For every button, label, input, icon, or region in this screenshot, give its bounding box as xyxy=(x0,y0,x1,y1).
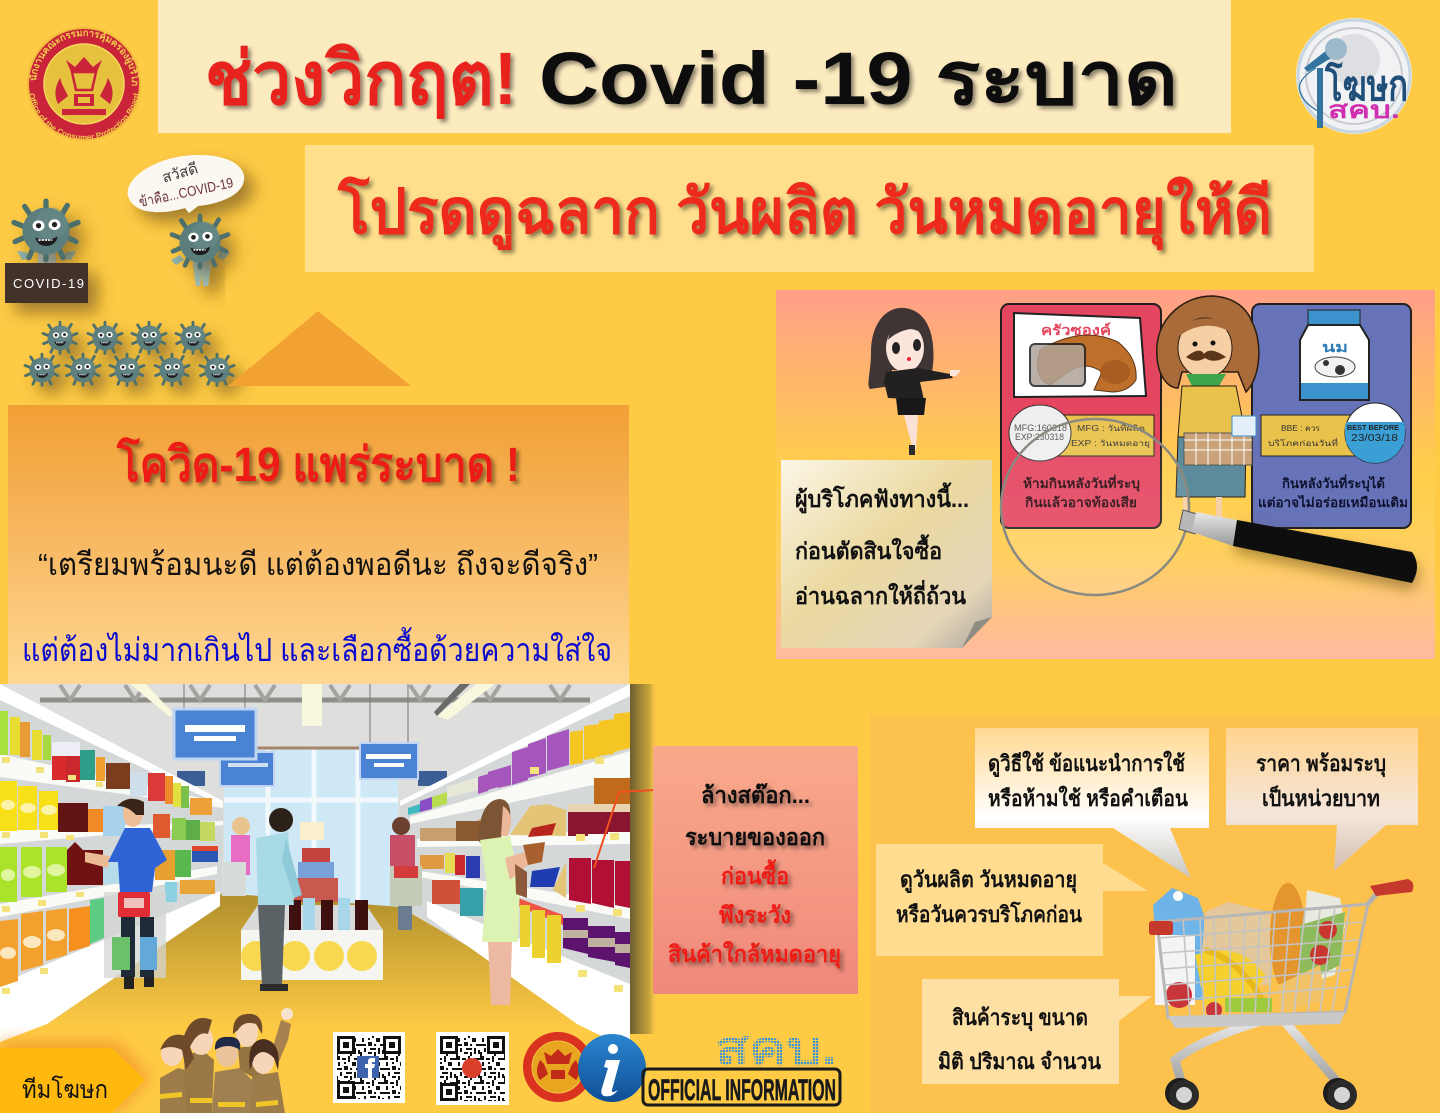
sign: covid-19: COVID-19 xyxy=(13,276,84,291)
callout: greeting speech bubble: สวัสดี xyxy=(160,160,200,187)
shopper: small woman right xyxy=(390,817,422,930)
left products xyxy=(0,711,218,987)
text: warning lines: ระบายของออก xyxy=(685,824,825,850)
text: warning lines: พึงระวัง xyxy=(719,902,791,928)
right products xyxy=(408,712,630,968)
card: use-by red: กินแล้วอาจท้องเสีย xyxy=(1025,495,1137,510)
text: do not eat: ห้ามกินหลังวันที่ระบุ xyxy=(1023,474,1140,492)
subtitle: โปรดดูฉลาก วันผลิต วันหมดอายุให้ดี xyxy=(337,175,1272,250)
panel: label checklist xyxy=(870,715,1440,1113)
right shelves xyxy=(400,684,630,1040)
icon: consumer protection board seal left xyxy=(27,27,141,141)
belts xyxy=(160,1092,278,1107)
text: note lines xyxy=(795,482,969,609)
panel: clear stock warning xyxy=(653,746,858,994)
illustration: officer team xyxy=(160,1008,293,1113)
raised arm xyxy=(272,1020,291,1064)
milk carton: นม xyxy=(1322,339,1348,355)
icon: standing virus xyxy=(171,216,230,286)
panel: title banner xyxy=(158,0,1231,133)
icon: crowd of viruses xyxy=(25,322,234,385)
panel: consumer label guide xyxy=(776,290,1435,659)
officer bodies xyxy=(160,1068,192,1113)
panel: subtitle banner xyxy=(305,145,1314,272)
icon: seal QR code xyxy=(436,1032,509,1105)
card: best before blue xyxy=(1252,304,1411,528)
text: warning lines: สินค้าใกล้หมดอายุ xyxy=(668,940,841,969)
croissant packet xyxy=(1014,313,1146,397)
text: warning lines: ล้างสต๊อก... xyxy=(701,782,810,808)
arrow: team tag xyxy=(0,1040,152,1113)
pointer line to shelf xyxy=(594,790,654,868)
callout: size: สินค้าระบุ ขนาด xyxy=(952,1005,1088,1032)
callout: greeting speech bubble xyxy=(128,155,244,213)
icon: information xyxy=(578,1034,646,1102)
signs xyxy=(184,684,408,745)
icon: consumer protection board seal left: Office of the Consumer Protection Board xyxy=(30,93,139,140)
frame xyxy=(1175,1022,1340,1088)
illustration: shopper woman xyxy=(1157,296,1259,527)
milk carton xyxy=(1300,310,1369,400)
heading: outbreak: โควิด-19 แพร่ระบาด ! xyxy=(116,436,520,492)
groceries xyxy=(1153,888,1204,1000)
callout: listen here note xyxy=(781,460,992,648)
text: official information badge xyxy=(643,1022,840,1107)
text: quote: “เตรียมพร้อมนะดี แต่ต้องพอดีนะ ถึงจะดีจริง” xyxy=(38,547,598,582)
floor xyxy=(0,893,630,1113)
shopper: woman in green xyxy=(478,799,545,1005)
icon: spokesperson logo right: โฆษก xyxy=(1324,61,1408,109)
croissant packet: ครัวซองค์ xyxy=(1041,322,1111,338)
icon: magnifying glass xyxy=(1001,419,1418,595)
label: mfg exp: EXP : วันหมดอายุ xyxy=(1071,439,1150,448)
callout: size: มิติ ปริมาณ จำนวน xyxy=(938,1049,1101,1074)
label: mfg exp xyxy=(1009,405,1154,461)
label: best before: BBE : ควร xyxy=(1281,424,1321,433)
icon: virus holding covid sign xyxy=(5,201,88,303)
window xyxy=(224,748,398,908)
callout: instructions xyxy=(975,728,1209,878)
card: best before blue: แต่อาจไม่อร่อยเหมือนเดิม xyxy=(1258,494,1408,510)
faces xyxy=(161,1040,183,1066)
callout: size xyxy=(922,979,1152,1084)
text: advice: แต่ต้องไม่มากเกินไป และเลือกซื้อด้วยความใส่ใจ xyxy=(22,627,612,668)
callout: price: เป็นหน่วยบาท xyxy=(1262,784,1380,811)
illustration: presenter girl xyxy=(868,308,961,455)
label: best before: 23/03/18 xyxy=(1351,433,1399,444)
callout: dates: หรือวันควรบริโภคก่อน xyxy=(896,901,1082,927)
handle xyxy=(1368,885,1412,904)
callout: dates xyxy=(876,844,1148,956)
wheels xyxy=(1165,1078,1195,1108)
icon: microphone xyxy=(1299,38,1347,128)
text: warning lines: ก่อนซื้อ xyxy=(721,859,789,889)
label: mfg exp: EXP:230318 xyxy=(1015,432,1064,442)
title: main heading: Covid -19 ระบาด xyxy=(539,37,1178,120)
shopper: man in blue xyxy=(85,799,167,989)
display table xyxy=(241,930,383,980)
text: official information badge: OFFICIAL INFORMATION xyxy=(648,1074,836,1107)
callout: instructions: หรือห้ามใช้ หรือคำเตือน xyxy=(988,785,1188,811)
text: OCPB pixel word: สคบ. xyxy=(715,1022,837,1074)
shopper: small woman left xyxy=(222,817,250,896)
title: main heading xyxy=(205,37,1178,120)
left shelves xyxy=(0,684,223,1042)
icon: seal small xyxy=(523,1032,593,1102)
callout: dates: ดูวันผลิต วันหมดอายุ xyxy=(900,867,1077,894)
label: best before: BEST BEFORE xyxy=(1347,425,1399,432)
label: mfg exp: MFG : วันที่ผลิต xyxy=(1077,422,1145,433)
shelf tags xyxy=(2,757,623,994)
callout: price: ราคา พร้อมระบุ xyxy=(1256,751,1386,778)
label: mfg exp: MFG:160318 xyxy=(1014,423,1067,433)
icon: spokesperson logo right xyxy=(1296,18,1412,134)
label: best before xyxy=(1261,403,1405,463)
arrow: orange triangle pointer xyxy=(228,311,411,386)
callout: instructions: ดูวิธีใช้ ข้อแนะนำการใช้ xyxy=(988,750,1185,778)
text: note lines: ผู้บริโภคฟังทางนี้... xyxy=(795,482,969,514)
text: spokesperson team: ทีมโฆษก xyxy=(22,1075,108,1104)
title: main heading: ช่วงวิกฤต! xyxy=(205,37,517,120)
chart: supermarket aisle illustration xyxy=(0,684,658,1113)
text: may not taste: กินหลังวันที่ระบุได้ xyxy=(1282,474,1385,492)
callout: greeting speech bubble: ข้าคือ...COVID-19 xyxy=(137,174,235,210)
card: use-by red xyxy=(1001,304,1161,528)
icon: facebook QR code xyxy=(333,1032,405,1103)
ceiling xyxy=(0,684,630,909)
shopper: man centre xyxy=(256,808,302,991)
panel: outbreak message xyxy=(8,405,629,684)
icon: grocery cart xyxy=(1149,879,1413,1110)
text: warning lines xyxy=(668,782,841,969)
basket wire xyxy=(1157,904,1368,1018)
text: note lines: ก่อนตัดสินใจซื้อ xyxy=(795,534,942,564)
icon: spokesperson logo right: สคบ. xyxy=(1328,97,1400,124)
text: note lines: อ่านฉลากให้ถี่ถ้วน xyxy=(795,579,966,609)
callout: price xyxy=(1226,728,1418,871)
label: best before: บริโภคก่อนวันที่ xyxy=(1268,437,1338,448)
